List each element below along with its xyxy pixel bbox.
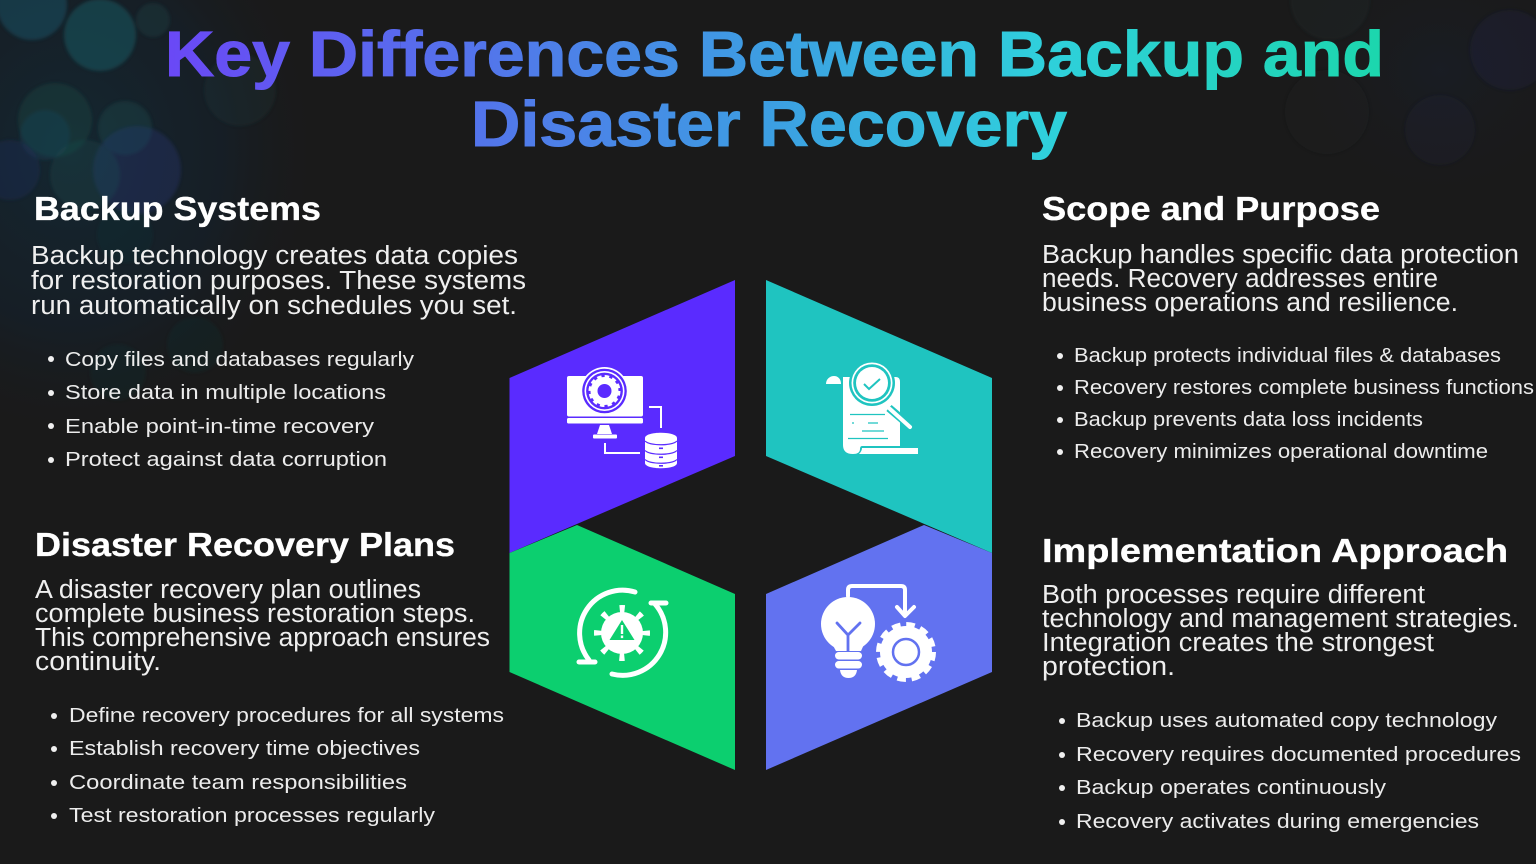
bullet list: implementation: Recovery requires documented procedures [1076,743,1521,766]
segment: blue [766,525,992,770]
bullet list: disaster recovery [51,704,504,827]
text block: implementation description [1042,581,1519,681]
bullet list: implementation: Recovery activates during emergencies [1076,810,1479,833]
text block: disaster recovery description: This comprehensive approach ensures [35,624,490,652]
heading: scope and purpose: Scope and Purpose [1042,191,1380,228]
text block: backup systems description: run automatically on schedules you set. [31,292,517,320]
panel: implementation approach [1042,533,1521,833]
text block: implementation description: technology and management strategies. [1042,605,1519,633]
bullet list: scope: Backup prevents data loss incidents [1074,408,1423,431]
bullet list: backup systems: Protect against data corruption [65,448,387,471]
icon: gear with warning and circular arrows [579,590,666,675]
bullet list: disaster recovery: Establish recovery time objectives [69,737,420,760]
bullet list: scope [1057,344,1534,463]
panel: backup systems [31,191,526,471]
panel: disaster recovery plans [35,527,504,827]
text block: backup systems description: Backup technology creates data copies [31,242,518,270]
text block: disaster recovery description: continuity. [35,648,161,676]
text block: scope description [1042,241,1519,317]
text block: scope description: business operations and resilience. [1042,289,1458,317]
text block: backup systems description: for restoration purposes. These systems [31,267,526,295]
bullet list: scope: Recovery minimizes operational downtime [1074,440,1488,463]
bullet list: disaster recovery: Coordinate team responsibilities [69,771,407,794]
bullet list: implementation: Backup uses automated copy technology [1076,709,1498,732]
title: Disaster Recovery [471,88,1067,160]
segment: purple [510,280,735,553]
text block: disaster recovery description: A disaster recovery plan outlines [35,576,421,604]
panel: hexagon diagram [510,280,992,770]
title: Key Differences Between Backup and [165,18,1384,90]
text block: scope description: Backup handles specific data protection [1042,241,1519,269]
bullet list: backup systems [48,348,415,471]
heading: backup systems: Backup Systems [34,191,321,228]
panel: scope and purpose [1042,191,1534,463]
heading: disaster recovery plans: Disaster Recovery Plans [35,527,455,564]
bullet list: disaster recovery: Test restoration processes regularly [69,804,436,827]
bullet list: scope: Recovery restores complete business functions [1074,376,1534,399]
heading: implementation approach: Implementation Approach [1042,533,1508,570]
bullet list: backup systems: Store data in multiple locations [65,381,386,404]
segment: teal [766,280,992,553]
title [165,18,1384,160]
bullet list: implementation [1059,709,1521,833]
text block: implementation description: Integration creates the strongest [1042,629,1434,657]
text block: implementation description: protection. [1042,653,1175,681]
text block: implementation description: Both processes require different [1042,581,1425,609]
text block: backup systems description [31,242,526,320]
bullet list: backup systems: Enable point-in-time recovery [65,415,375,438]
segment: green [510,525,735,770]
icon: document with magnifier [826,360,918,454]
icon: lightbulb to gear [821,586,933,679]
bullet list: scope: Backup protects individual files & databases [1074,344,1501,367]
text block: disaster recovery description [35,576,490,676]
text block: disaster recovery description: complete business restoration steps. [35,600,475,628]
text block: scope description: needs. Recovery addresses entire [1042,265,1438,293]
bullet list: backup systems: Copy files and databases regularly [65,348,415,371]
bullet list: implementation: Backup operates continuously [1076,776,1387,799]
bullet list: disaster recovery: Define recovery procedures for all systems [69,704,504,727]
icon: monitor with gear and database [567,367,677,468]
